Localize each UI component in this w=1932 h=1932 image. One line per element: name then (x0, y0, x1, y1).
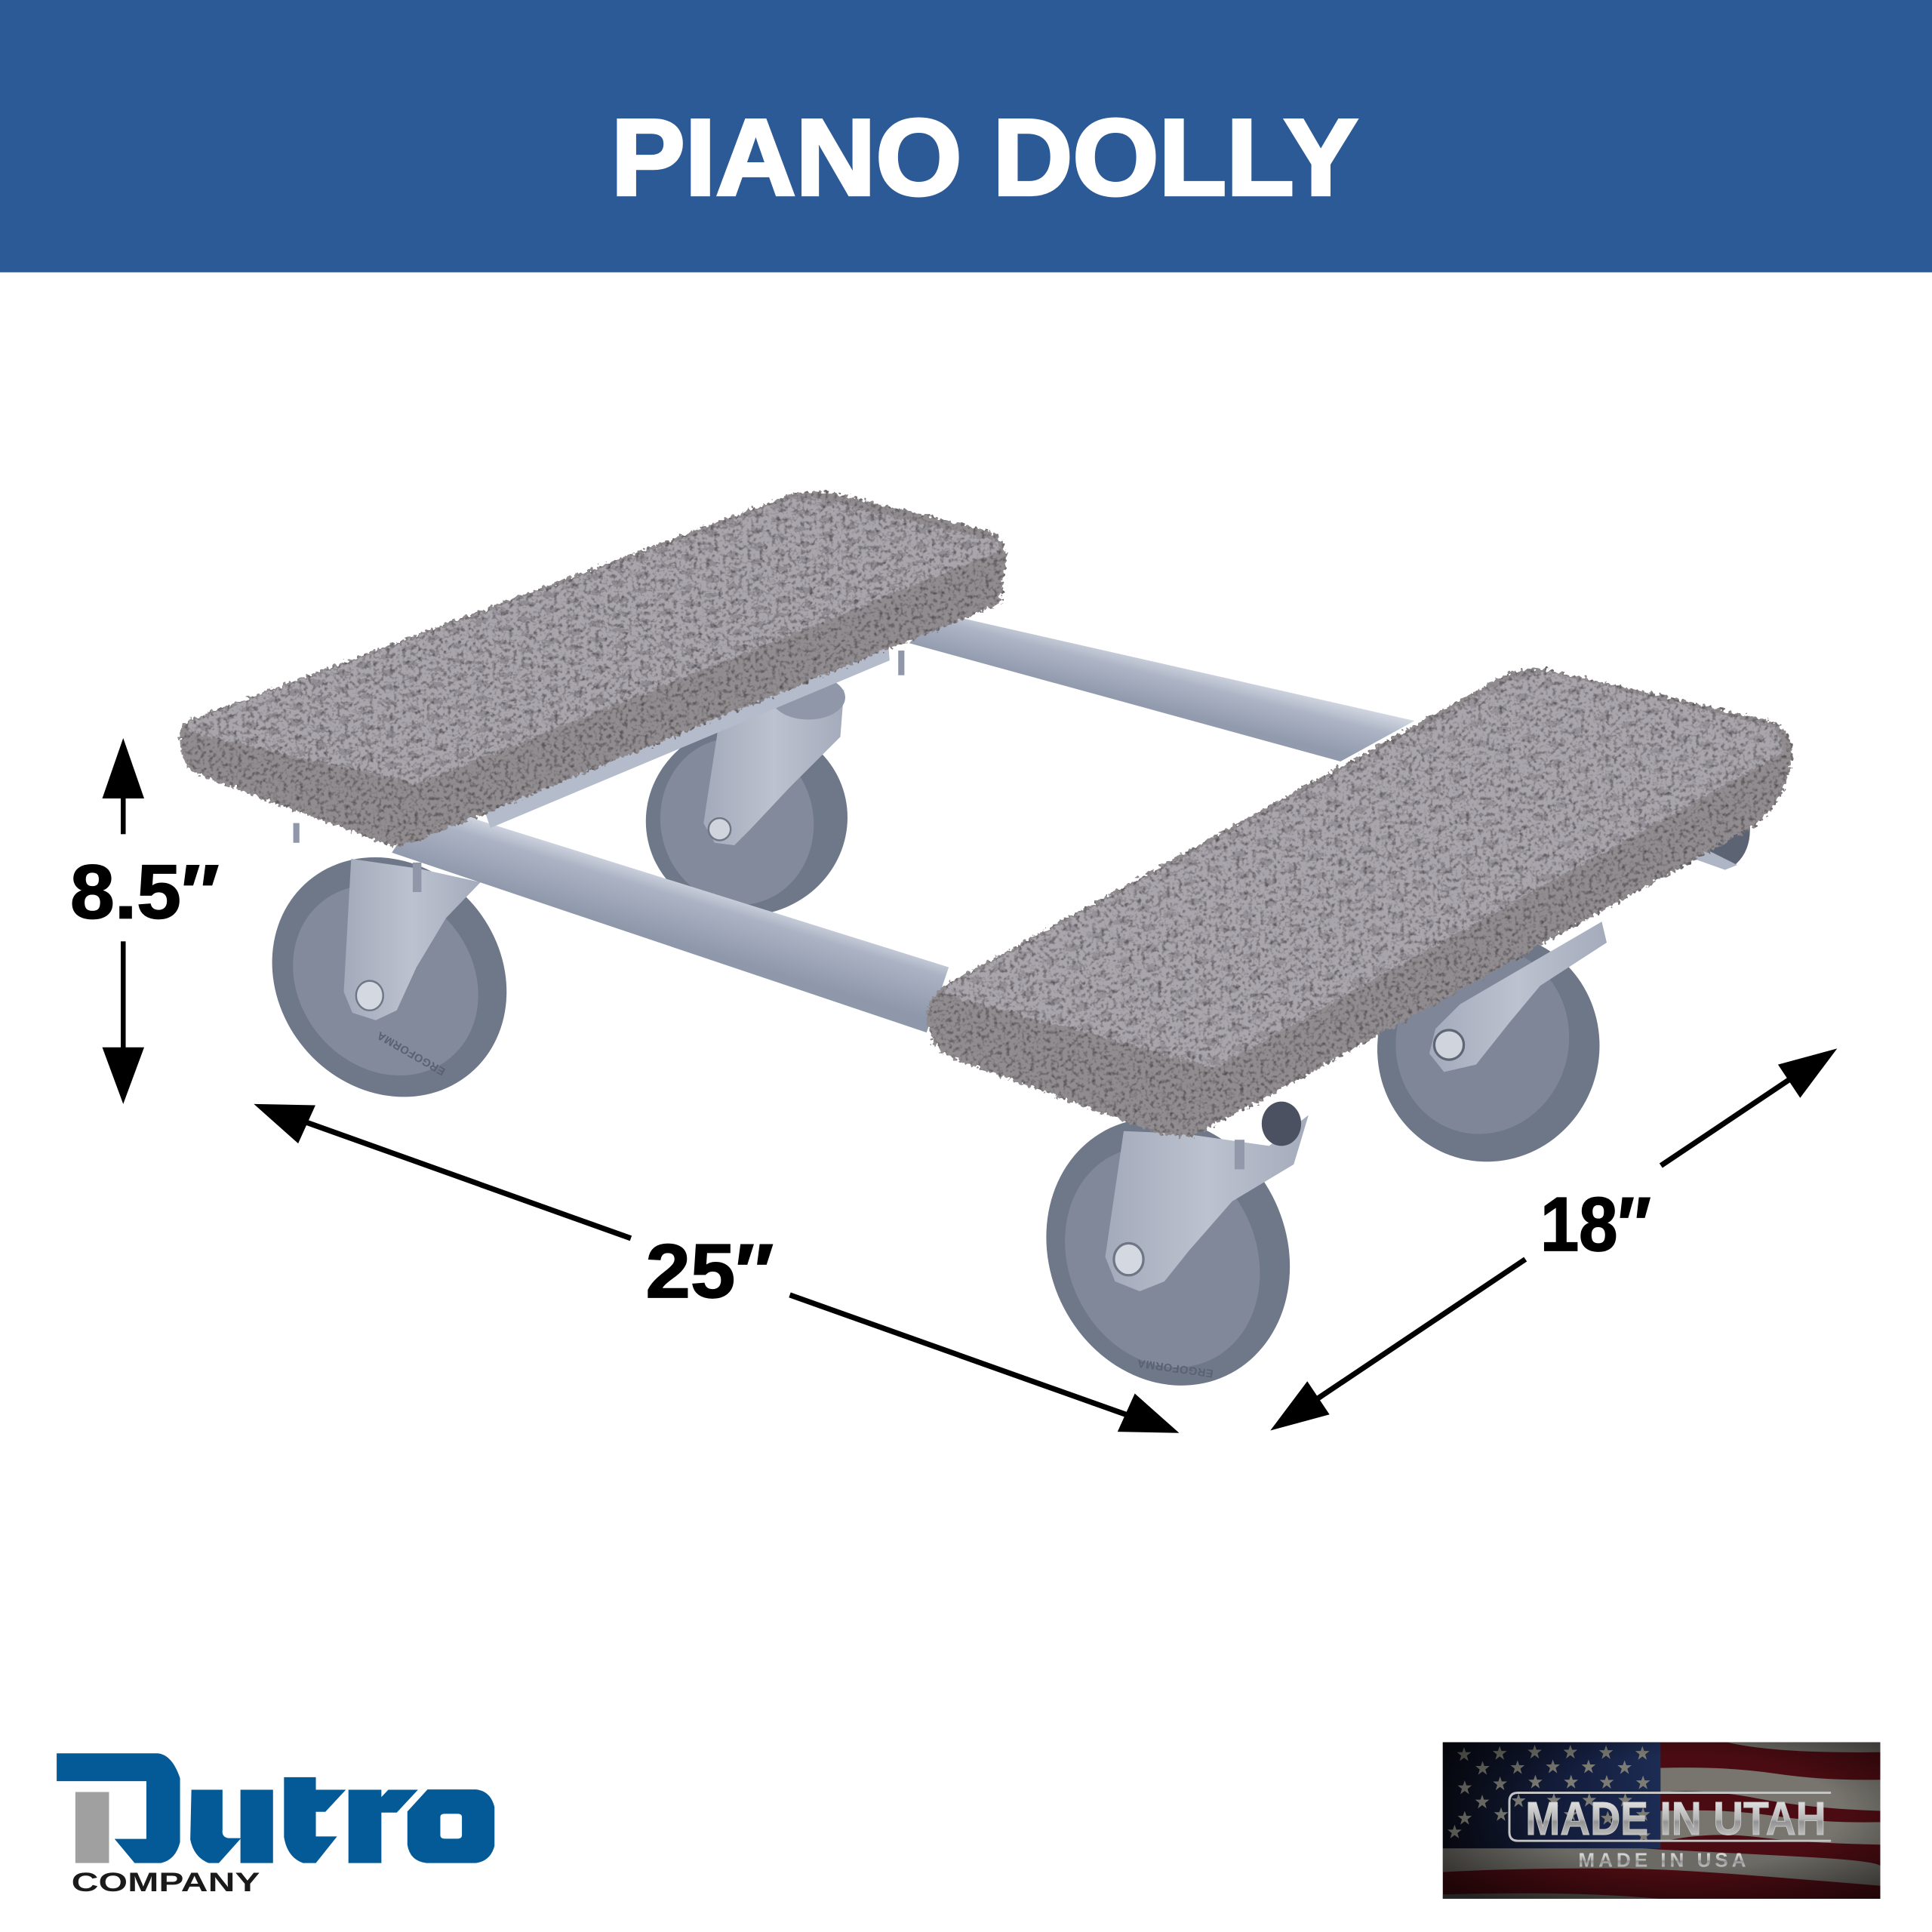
wheel: back right (1353, 909, 1624, 1186)
carpet pad: back left (180, 491, 1006, 846)
tire marking: ERGOFORMA (375, 1029, 448, 1078)
back tube (909, 612, 1414, 761)
badge: Made in Utah flag: MADE IN UTAH (1525, 1793, 1826, 1845)
tire marking: ERGOFORMA (1137, 1356, 1214, 1379)
logo: Dutro Company: COMPANY (72, 1867, 260, 1897)
caster fork: front left (344, 859, 481, 1020)
logo: Dutro Company (57, 1753, 494, 1897)
dimension: height arrow (103, 738, 144, 1104)
dimension: width arrow (1270, 1048, 1837, 1431)
dimension label: length: 25″ (646, 1229, 774, 1314)
caster fork: front right (1105, 1115, 1309, 1291)
wheel: front right (1003, 1078, 1333, 1426)
back-right wheel peeking behind pad (1690, 823, 1750, 870)
dimension label: width: 18″ (1540, 1182, 1651, 1267)
mounting plate: left pad (481, 631, 890, 828)
dimension label: height: 8.5″ (70, 849, 220, 934)
product photo: piano dolly (180, 491, 1792, 1426)
header band (0, 0, 1932, 272)
dimension: length arrow (254, 1104, 1179, 1433)
title: PIANO DOLLY (611, 97, 1358, 218)
wheel: back left (628, 675, 866, 934)
badge: Made in Utah flag: MADE IN USA (1578, 1848, 1746, 1871)
badge: Made in Utah flag (1443, 1743, 1880, 1899)
caster fork: back left (703, 690, 844, 845)
caster fork: back right (1429, 921, 1607, 1072)
carpet pad: front right (927, 669, 1792, 1137)
front tube (392, 803, 949, 1032)
wheel: front left (223, 810, 555, 1145)
